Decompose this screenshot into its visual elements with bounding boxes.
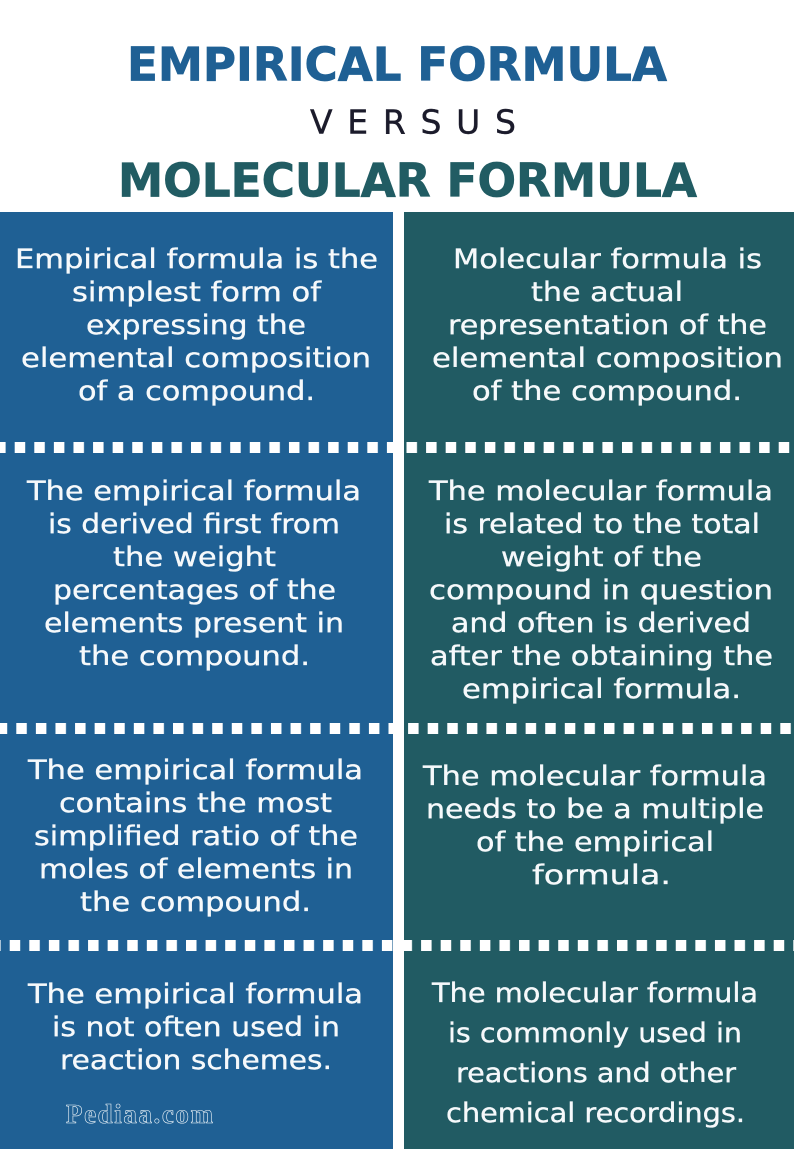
text block: molecular row 4: is commonly used in xyxy=(448,1018,742,1049)
text block: molecular row 4: reactions and other xyxy=(456,1058,737,1089)
title: empirical formula: EMPIRICAL FORMULA xyxy=(127,38,667,92)
text block: empirical row 2: elements present in xyxy=(44,608,344,639)
text block: molecular row 2: after the obtaining the xyxy=(430,641,773,672)
text block: empirical row 3: The empirical formula xyxy=(27,755,363,786)
text block: empirical row 3: moles of elements in xyxy=(39,854,353,885)
dotted divider row 3 xyxy=(0,940,794,951)
text block: empirical row 1: simplest form of xyxy=(72,277,323,308)
text block: molecular row 2: The molecular formula xyxy=(428,476,773,507)
text block: molecular row 1: Molecular formula is xyxy=(453,244,762,275)
text block: molecular row 1: of the compound. xyxy=(472,376,742,407)
text block: empirical row 1: elemental composition xyxy=(21,343,371,374)
text block: empirical row 4: is not often used in xyxy=(52,1012,340,1043)
text block: molecular row 2 xyxy=(428,476,773,705)
text block: empirical row 3: contains the most xyxy=(59,788,332,819)
text block: empirical row 4: reaction schemes. xyxy=(60,1045,332,1076)
text block: empirical row 4 xyxy=(27,979,363,1076)
text block: molecular row 3: The molecular formula xyxy=(422,761,767,792)
text block: empirical row 2: The empirical formula xyxy=(26,476,361,507)
text block: molecular row 2: compound in question xyxy=(429,575,773,606)
panel: molecular column background xyxy=(404,212,794,1149)
text block: empirical row 2: the compound. xyxy=(79,641,310,672)
text block: molecular row 3: of the empirical xyxy=(476,827,714,858)
text block: empirical row 3: the compound. xyxy=(80,887,311,918)
subtitle: versus: VERSUS xyxy=(310,102,516,142)
watermark: Pediaa.com: Pediaa.com xyxy=(66,1099,214,1129)
text block: molecular row 2: weight of the xyxy=(501,542,702,573)
text block: empirical row 2: the weight xyxy=(113,542,276,573)
text block: molecular row 1: elemental composition xyxy=(432,343,783,374)
text block: empirical row 2: is derived first from xyxy=(48,509,340,540)
text block: molecular row 1 xyxy=(432,244,783,407)
text block: empirical row 3: simplified ratio of the xyxy=(34,821,358,852)
text block: empirical row 1: of a compound. xyxy=(78,376,315,407)
text block: molecular row 3 xyxy=(422,761,767,891)
text block: molecular row 2: is related to the total xyxy=(444,509,760,540)
text block: empirical row 3 xyxy=(27,755,363,918)
text block: empirical row 1: expressing the xyxy=(86,310,306,341)
text block: molecular row 4: The molecular formula xyxy=(431,978,758,1009)
text block: molecular row 1: representation of the xyxy=(448,310,767,341)
dotted divider row 2 xyxy=(0,723,794,734)
text block: empirical row 1 xyxy=(15,244,378,407)
text block: molecular row 1: the actual xyxy=(531,277,683,308)
text block: empirical row 2 xyxy=(26,476,361,672)
text block: molecular row 2: empirical formula. xyxy=(462,674,741,705)
text block: molecular row 3: needs to be a multiple xyxy=(426,794,764,825)
title: molecular formula: MOLECULAR FORMULA xyxy=(118,154,697,208)
panel: empirical column background xyxy=(0,212,393,1149)
dotted divider row 1 xyxy=(0,442,794,453)
text block: molecular row 4 xyxy=(431,978,758,1129)
text block: molecular row 2: and often is derived xyxy=(451,608,751,639)
text block: empirical row 2: percentages of the xyxy=(53,575,336,606)
text block: molecular row 3: formula. xyxy=(532,860,671,891)
text block: empirical row 1: Empirical formula is the xyxy=(15,244,378,275)
text block: molecular row 4: chemical recordings. xyxy=(446,1098,745,1129)
text block: empirical row 4: The empirical formula xyxy=(27,979,363,1010)
